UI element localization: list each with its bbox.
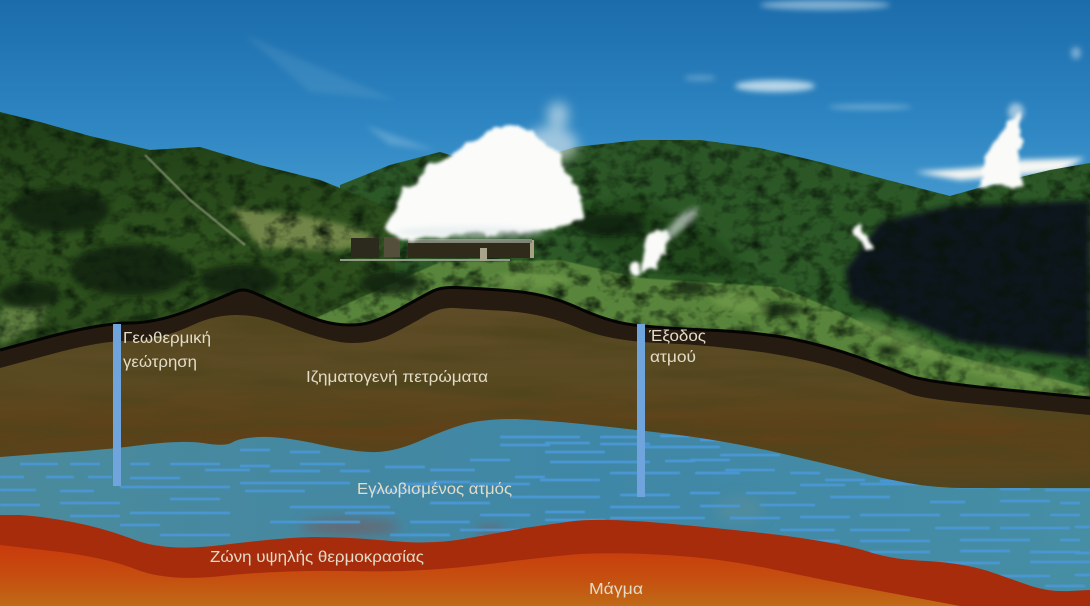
water dashes: [0, 436, 1090, 586]
label: steam outlet: Έξοδος: [648, 328, 706, 345]
label: high temperature zone: Ζώνη υψηλής θερμοκρασίας: [210, 549, 424, 566]
icon: steam plumes: [630, 103, 1024, 275]
ground surface line: [0, 287, 1090, 398]
label: magma: Μάγμα: [589, 581, 643, 598]
photo: mountains: [0, 112, 1090, 420]
label: trapped steam: Εγλωβισμένος ατμός: [357, 481, 512, 498]
label: geothermal drilling: γεώτρηση: [123, 354, 197, 371]
label: geothermal drilling: [123, 330, 211, 371]
label: steam outlet: [648, 328, 706, 366]
layer: sedimentary rock: [0, 287, 1090, 488]
layer: high temperature zone: [0, 515, 1090, 606]
label: sedimentary rocks: Ιζηματογενή πετρώματα: [306, 369, 488, 386]
well: steam outlet: [637, 324, 645, 497]
photo: vegetation shadows and grass: [0, 155, 1070, 395]
icon: main steam cloud: [386, 102, 584, 238]
well: geothermal drill: [113, 324, 121, 486]
label: geothermal drilling: Γεωθερμική: [123, 330, 211, 347]
layer: dark topsoil: [0, 287, 1090, 415]
layer: trapped steam water: [0, 410, 1090, 606]
layer: magma: [0, 545, 960, 606]
photo: sky: [0, 0, 1090, 420]
icon: power plant buildings: [340, 237, 534, 261]
label: steam outlet: ατμού: [650, 349, 696, 366]
